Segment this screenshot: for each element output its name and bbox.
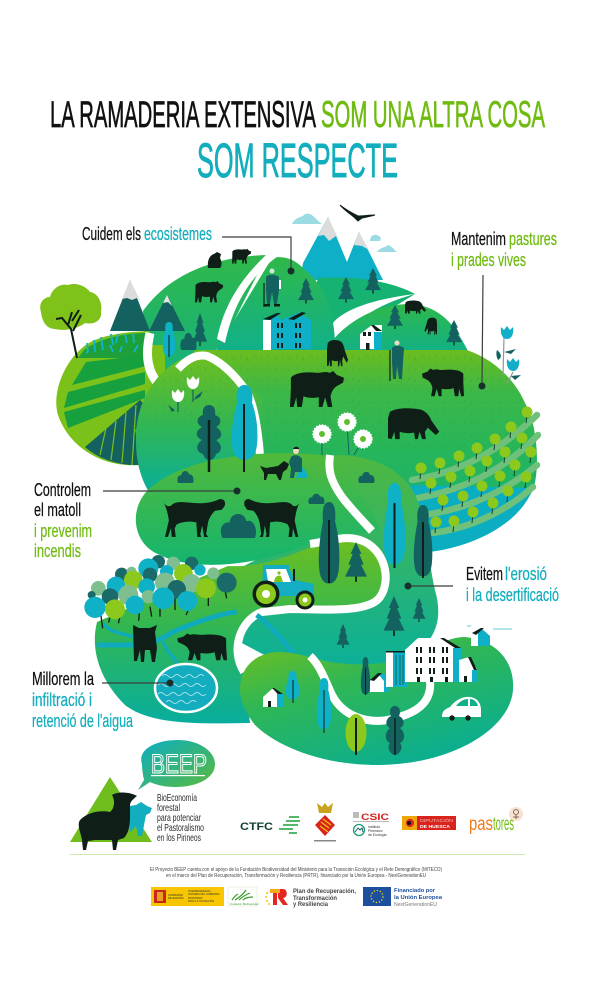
logo: BEEP: BEEP xyxy=(151,749,207,779)
logo: pastores: tores xyxy=(493,814,514,835)
label: scrub: i prevenim xyxy=(34,520,92,541)
mid left blob xyxy=(136,354,262,497)
logo: Gobierno de España: TERCERA DEL GOBIERNO xyxy=(188,893,219,896)
back right hill xyxy=(300,278,415,345)
funding statement: El Proyecto BEEP cuenta con el apoyo de la Fundación Biodiversidad del Ministerio para la Transición Ecológica y el Reto Demográfico (MITECO) xyxy=(150,867,442,873)
meadow xyxy=(135,350,537,560)
shepherd top xyxy=(264,268,281,307)
vineyard xyxy=(410,406,538,552)
label: erosion: Evitem xyxy=(466,563,503,584)
centre column hill xyxy=(236,455,438,668)
illustrated landscape xyxy=(40,205,538,765)
buildings top xyxy=(263,312,311,350)
lime tree trunk xyxy=(56,310,81,358)
white road left xyxy=(147,333,160,386)
logo: CTFC xyxy=(240,817,300,833)
label: pastures: pastures xyxy=(509,228,557,249)
label: ecosystems: Cuidem els xyxy=(82,223,141,244)
title: LA RAMADERIA EXTENSIVA xyxy=(50,94,316,135)
white road centre xyxy=(329,455,372,531)
person with dog xyxy=(260,447,308,480)
logo: Fundación Biodiversidad: Fundación Biodiversidad xyxy=(230,902,259,906)
label: scrub xyxy=(34,479,92,561)
mid left grass xyxy=(142,357,258,430)
divider xyxy=(70,854,525,855)
flowers xyxy=(168,326,521,455)
label: pastures xyxy=(451,228,557,270)
white road back right xyxy=(333,294,415,340)
subtitle: SOM RESPECTE xyxy=(197,135,398,188)
teal mountains and clouds xyxy=(292,214,397,280)
funding statement xyxy=(150,867,442,879)
label: erosion: l'erosió xyxy=(505,563,547,584)
logo: CSIC: de Ecología xyxy=(368,833,387,837)
back hill left xyxy=(143,255,267,400)
funding statement: en el marco del Plan de Recuperación, Transformación y Resiliencia (PRTR), financiado por la Unión Europea - NextGenerationEU xyxy=(166,873,426,879)
trees and bushes xyxy=(163,268,462,755)
logo: Gobierno de España: VICEPRESIDENCIA xyxy=(188,890,211,893)
logo: Gobierno de España: DE ESPAÑA xyxy=(168,895,184,900)
logo: European Union: NextGenerationEU xyxy=(394,902,437,908)
logo: CSIC: Pirenaico xyxy=(368,829,383,833)
logo: Diputación de Huesca: DE HUESCA xyxy=(420,824,451,830)
animals xyxy=(133,249,464,662)
icon: eagle xyxy=(340,205,375,221)
logo: Plan de Recuperación: Plan de Recuperación, xyxy=(293,889,356,895)
label: ecosystems: ecosistemes xyxy=(144,223,212,244)
label: water xyxy=(32,668,133,731)
label: scrub: el matoll xyxy=(34,499,81,520)
logo: BEEP: para potenciar xyxy=(157,812,201,824)
logo: pastores: pas xyxy=(469,814,493,835)
house hill xyxy=(360,325,382,350)
logo: Gobierno de España: MINISTERIO xyxy=(188,897,203,900)
car xyxy=(442,697,481,721)
label: scrub: Controlem xyxy=(34,479,91,500)
logo: Diputación de Huesca: DIPUTACIÓN xyxy=(420,817,453,823)
callout line: ecosystems xyxy=(222,237,294,274)
logo: Gobierno de España xyxy=(151,887,224,906)
logo: Gobierno de España: GOBIERNO xyxy=(168,893,184,897)
logo: BEEP: en los Pirineos xyxy=(157,832,201,844)
logo: pastores xyxy=(469,807,523,835)
logo: Fundación Biodiversidad xyxy=(228,887,259,906)
house lower left xyxy=(263,688,283,707)
logo: BEEP: el Pastoralismo xyxy=(157,822,204,834)
white road bottom xyxy=(310,656,430,721)
lime tree crown left xyxy=(40,284,101,330)
label: erosion xyxy=(466,563,559,605)
logo: Plan de Recuperación: y Resiliencia xyxy=(293,902,329,908)
label: pastures: i prades vives xyxy=(451,249,526,270)
logo: Gobierno de España: PARA LA TRANSICIÓN xyxy=(188,900,214,903)
callout line: erosion xyxy=(404,582,453,590)
bottom hill xyxy=(240,637,513,765)
logo: CSIC xyxy=(353,812,390,837)
callout line: water xyxy=(102,680,174,686)
left mountains xyxy=(110,280,185,331)
white road tractor loop xyxy=(238,538,386,672)
logo: BEEP xyxy=(70,740,215,850)
tractor xyxy=(252,565,314,610)
goat hill xyxy=(136,453,380,565)
logo: CSIC: CSIC xyxy=(361,812,390,822)
logo: BEEP: forestal xyxy=(157,802,180,814)
white road mid xyxy=(178,356,260,455)
logo: Plan de Recuperación xyxy=(265,889,356,908)
logo: crest xyxy=(314,803,336,842)
farmer xyxy=(390,340,404,381)
label: water: retenció de l'aigua xyxy=(32,710,133,731)
white road centre back xyxy=(217,254,281,343)
crop field xyxy=(56,331,165,465)
callout line: scrub xyxy=(103,488,240,494)
logo: European Union xyxy=(363,887,443,908)
small hill xyxy=(333,304,470,355)
label: scrub: incendis xyxy=(34,540,81,561)
logo: European Union: la Unión Europea xyxy=(394,895,443,901)
town buildings xyxy=(370,626,512,692)
logo: Plan de Recuperación: Transformación xyxy=(293,896,337,902)
label: pastures: Mantenim xyxy=(451,228,506,249)
callout line: pastures xyxy=(478,275,486,390)
logo: Diputación de Huesca xyxy=(402,816,456,830)
label: water: infiltració i xyxy=(32,689,92,710)
pond xyxy=(155,664,217,712)
logo: CTFC: CTFC xyxy=(240,821,273,833)
logo: CSIC: Instituto xyxy=(368,825,380,829)
lower left and tractor hill xyxy=(95,535,388,723)
label: water: Millorem la xyxy=(32,668,94,689)
back hill right xyxy=(215,257,335,352)
river xyxy=(97,612,293,663)
tree cluster xyxy=(84,555,237,628)
logo: European Union: Financiado por xyxy=(394,888,436,894)
logo: BEEP: BioEconomía xyxy=(157,792,197,804)
